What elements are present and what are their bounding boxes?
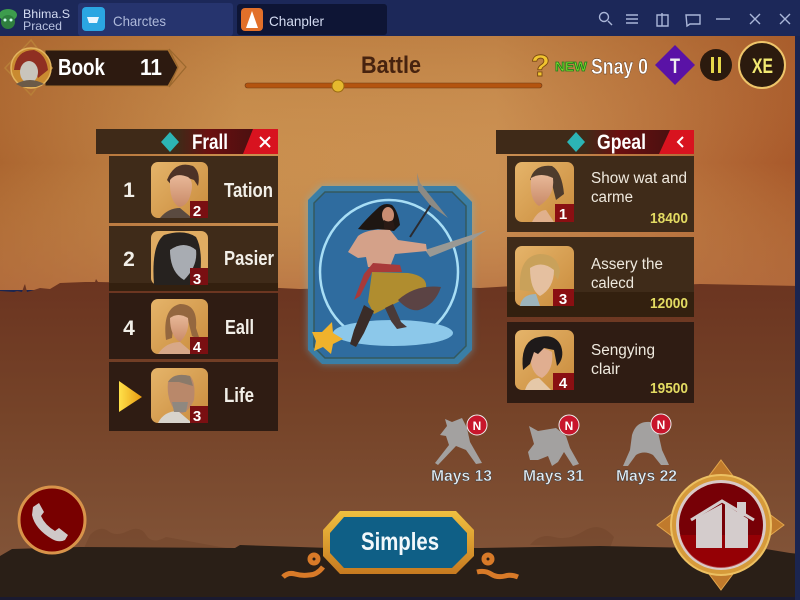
row 2: Pasier	[224, 248, 274, 270]
player badge: Book 11	[5, 40, 186, 95]
entry 3: 4	[559, 375, 568, 392]
house icon	[691, 501, 754, 548]
entry 3: 19500	[650, 380, 688, 397]
entry 1	[507, 156, 694, 232]
new tag: NEW	[555, 59, 588, 74]
entry 1: carme	[591, 189, 633, 206]
tab: characters	[78, 3, 233, 36]
row 3: 4	[193, 339, 202, 356]
button: Simples: Simples	[361, 528, 439, 556]
button: Simples	[283, 511, 518, 577]
app name: Bhima.S	[23, 7, 70, 21]
status row	[531, 42, 785, 88]
panel: Gpeal	[496, 130, 694, 403]
scroll ornaments	[283, 555, 518, 577]
title: Battle: Battle	[361, 52, 421, 79]
row 1: 2	[193, 203, 201, 220]
entry 2: calecd	[591, 275, 634, 292]
ground glow	[333, 320, 453, 346]
row 4	[109, 362, 278, 431]
top window bar	[0, 0, 800, 36]
help icon: ?	[531, 48, 550, 83]
purple T badge	[655, 45, 695, 85]
weapon	[410, 173, 487, 257]
warrior figure	[348, 204, 441, 347]
entry 2	[507, 237, 694, 317]
row 1	[109, 156, 278, 223]
tab: chapter: Chanpler	[269, 13, 324, 29]
entry 3: Sengying	[591, 342, 655, 359]
creature: Mays 22	[616, 414, 677, 485]
app logo	[0, 9, 17, 29]
panel header	[496, 130, 694, 154]
creature: Mays 31	[523, 415, 584, 485]
purple T badge: T	[670, 55, 680, 78]
window controls	[600, 12, 790, 26]
row 3: 4	[123, 317, 135, 340]
panel header: Frall	[192, 131, 228, 154]
row 2: 2	[123, 248, 135, 271]
app name	[23, 7, 70, 33]
app name: Praced	[23, 19, 62, 33]
panel header: Gpeal	[597, 131, 646, 154]
entry 2: 3	[559, 291, 567, 308]
row 4: 3	[193, 408, 201, 425]
XE button: XE	[752, 55, 773, 78]
entry 1: Show wat and	[591, 170, 687, 187]
entry 1: 18400	[650, 210, 688, 227]
pause button	[700, 49, 732, 81]
entry 1: 1	[559, 206, 567, 223]
label: Mays 13	[431, 468, 492, 485]
badge: N	[473, 419, 481, 433]
XE button	[739, 42, 785, 88]
phone button	[19, 487, 85, 553]
selection arrow	[119, 381, 142, 412]
row 2: 3	[193, 271, 201, 288]
row 2	[109, 226, 278, 291]
row 4: Life	[224, 385, 254, 407]
player avatar	[11, 48, 51, 88]
entry 3: clair	[591, 361, 620, 378]
entry 2: Assery the	[591, 256, 663, 273]
tab: characters: Charctes	[113, 13, 166, 29]
energy ring	[320, 200, 458, 344]
badge: N	[657, 418, 665, 432]
badge: N	[565, 419, 573, 433]
home button	[657, 460, 784, 590]
status text: Snay 0	[591, 54, 648, 79]
row 3	[109, 293, 278, 359]
row 3: Eall	[225, 317, 254, 339]
entry 2: 12000	[650, 295, 688, 312]
star	[312, 322, 343, 354]
row 1: Tation	[224, 180, 273, 202]
hero card	[308, 173, 487, 364]
player level: 11	[140, 54, 162, 80]
progress slider	[245, 80, 542, 92]
panel: Frall	[96, 129, 278, 431]
panel header	[96, 129, 278, 154]
label: Mays 31	[523, 468, 584, 485]
entry 3	[507, 322, 694, 403]
tab: chapter	[237, 4, 387, 35]
player name: Book	[58, 54, 105, 80]
row 1: 1	[123, 179, 135, 202]
creature: Mays 13	[431, 415, 492, 485]
label: Mays 22	[616, 468, 677, 485]
